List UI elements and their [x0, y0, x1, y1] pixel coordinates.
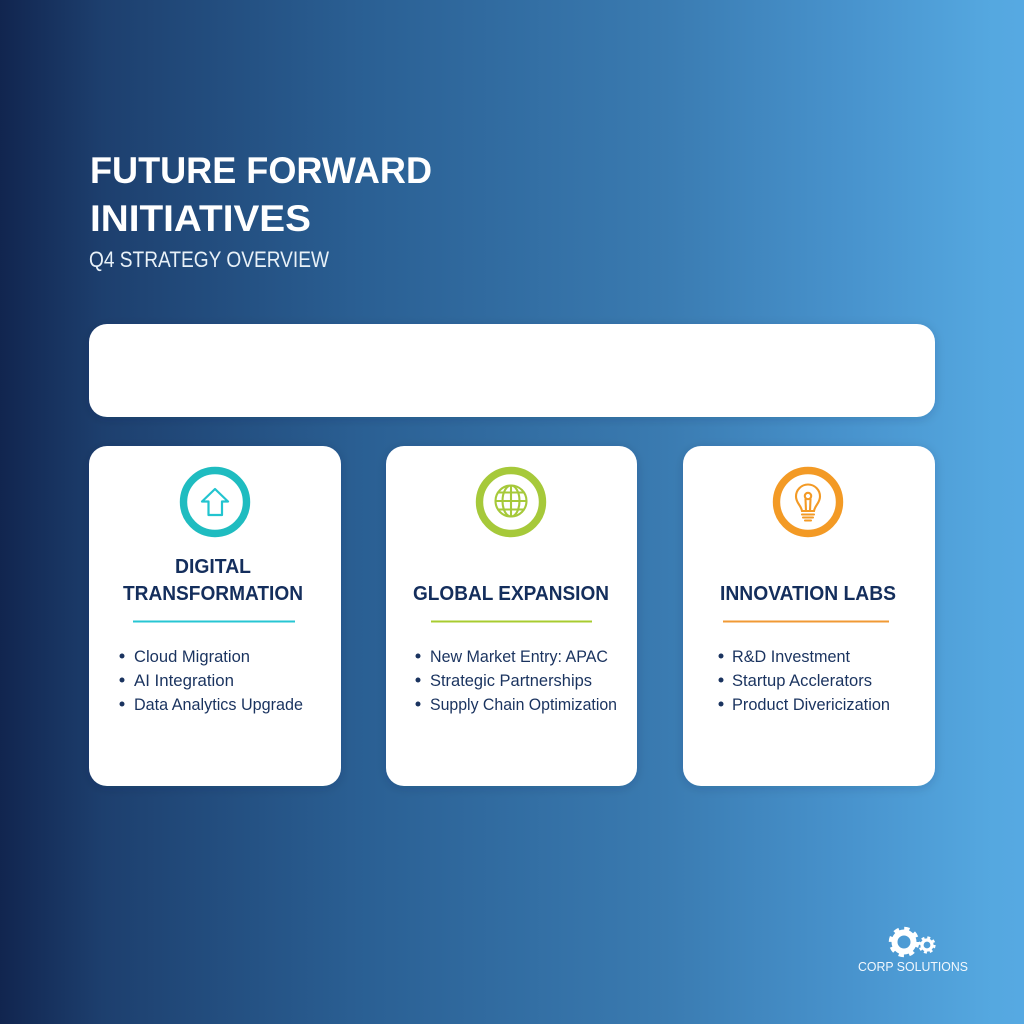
bullet list: R&D Investment [732, 647, 850, 666]
heading: TRANSFORMATION [123, 582, 303, 605]
title: INITIATIVES [90, 198, 311, 239]
panel: digital transformation [89, 446, 341, 786]
bullet list: Startup Acclerators [732, 671, 872, 690]
panel: empty banner [89, 324, 935, 417]
title [90, 150, 432, 239]
accent line [431, 620, 592, 622]
icon: light bulb [776, 470, 840, 534]
accent line [133, 620, 295, 622]
logo: corp solutions [858, 928, 968, 974]
bullet list: New Market Entry: APAC [430, 647, 608, 666]
heading [123, 555, 303, 605]
panel: innovation labs [683, 446, 935, 786]
accent line [723, 620, 889, 622]
icon: gears [890, 928, 934, 956]
heading: DIGITAL [175, 555, 251, 578]
bullet list [120, 647, 303, 714]
subtitle: Q4 STRATEGY OVERVIEW [89, 247, 329, 272]
title: FUTURE FORWARD [90, 150, 432, 191]
heading: INNOVATION LABS [720, 582, 896, 605]
bullet list [718, 647, 890, 714]
icon: globe [480, 470, 542, 534]
bullet list: Strategic Partnerships [430, 671, 592, 690]
bullet list: Data Analytics Upgrade [134, 695, 303, 714]
bullet list: Product Divericization [732, 695, 890, 714]
bullet list: Cloud Migration [134, 647, 250, 666]
logo text: CORP SOLUTIONS [858, 960, 968, 974]
bullet list [416, 647, 617, 714]
bullet list: AI Integration [134, 671, 234, 690]
icon: up arrow [184, 470, 246, 534]
heading: GLOBAL EXPANSION [413, 582, 609, 605]
panel: global expansion [386, 446, 637, 786]
bullet list: Supply Chain Optimization [430, 695, 617, 714]
